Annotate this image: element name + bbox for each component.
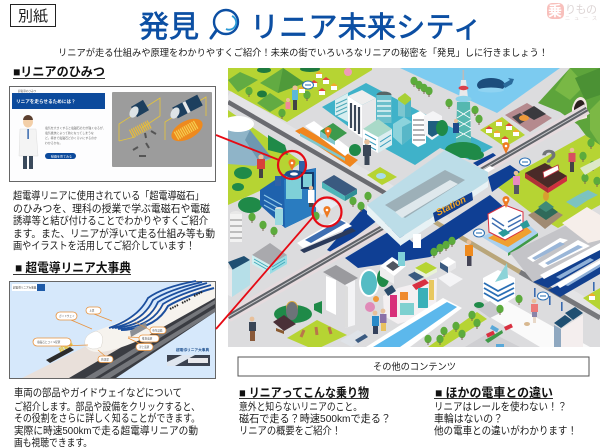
section: リニアってこんな乗り物: リニアの概要をご紹介！ [239, 424, 341, 437]
text block: 大事典 description: その役割をさらに詳しく知ることができます。 [14, 412, 200, 424]
description text: ど。極まで電磁石どのくらいにするのか [45, 135, 97, 140]
park: castle hill [495, 135, 600, 228]
person: elder [568, 148, 576, 172]
section: リニアってこんな乗り物: 磁石で走る？時速500kmで走る？ [239, 412, 391, 425]
site logo and thumbnail: 超電導リニア大事典 [176, 347, 209, 352]
stamp: 別紙: 別紙 [18, 8, 48, 25]
shopping street buildings [383, 270, 437, 324]
header band [12, 93, 105, 109]
heading: 超電導リニア大事典: ■ 超電導リニア大事典 [15, 260, 131, 275]
train [85, 281, 215, 352]
watermark logo [547, 3, 597, 22]
icon: magnifier [211, 10, 238, 38]
gate towers [314, 265, 358, 328]
text block: リニアのひみつ description: 超電導リニアに使用されている「超電導磁石」 [13, 189, 204, 202]
station sign: Station [434, 194, 468, 219]
guideway: 超電導 [58, 341, 74, 354]
heading box: その他のコンテンツ [238, 357, 589, 376]
header band: リニアを走らせるためには？ [16, 98, 76, 105]
section: ほかの電車との違い: ■ ほかの電車との違い [435, 385, 553, 400]
part labels: 先頭部 [101, 358, 109, 362]
castle [528, 191, 563, 229]
panel: screenshot of 超電導リニア大事典 [10, 281, 216, 378]
section: ほかの電車との違い: 車輪はないの？ [434, 412, 503, 425]
description text: 電気抵抗によって熱になってしまうな [45, 130, 94, 135]
people with balloons [365, 296, 386, 334]
part labels: 推進装置 [142, 336, 153, 340]
section: ほかの電車との違い [434, 385, 577, 437]
title [139, 10, 482, 44]
person: pink jacket [513, 171, 520, 194]
tower [445, 70, 484, 160]
text block: 大事典 description: 車両の部品やガイドウェイなどについて [14, 386, 182, 399]
description text: わかるかな。 [45, 140, 62, 145]
text block: リニアのひみつ description: 画やイラストを活用してご紹介しています！ [13, 239, 195, 252]
part labels: ガイドウェイ [59, 314, 75, 318]
lawn with deer [287, 320, 347, 350]
mall [482, 205, 538, 256]
person: family [286, 85, 298, 110]
panel: screenshot of リニアのひみつ [10, 86, 216, 182]
part labels: 上部 [89, 308, 95, 312]
person: orange shirt [465, 240, 473, 266]
road: main diagonal [228, 96, 600, 318]
text block: リニアのひみつ description: のひみつを、理科の授業で学ぶ電磁石や電磁 [13, 202, 210, 215]
section: リニアってこんな乗り物: ■ リニアってこんな乗り物 [239, 385, 369, 400]
water plaza under towers [322, 83, 493, 165]
temple with great buddha [273, 301, 312, 334]
section: リニアってこんな乗り物: 意外と知らないリニアのこと。 [239, 400, 362, 413]
scientist figure [19, 115, 38, 169]
building: white with skylight [380, 252, 406, 284]
watermark logo: りもの [565, 3, 597, 16]
stamp: 別紙 [10, 4, 56, 26]
elevated guideway [228, 109, 587, 317]
person: red jacket [257, 154, 265, 178]
callout: red circles and connectors [216, 135, 342, 329]
stacked and white blocks [415, 257, 463, 287]
site logo and thumbnail [167, 347, 210, 366]
text block: 大事典 description [14, 386, 200, 448]
park: lower left with mountain [222, 110, 302, 213]
experiment panel [112, 92, 212, 167]
navy platforms [327, 153, 520, 268]
heading box: その他のコンテンツ: その他のコンテンツ [373, 361, 456, 373]
watermark logo: 乗 [548, 3, 562, 19]
guideway [22, 282, 215, 378]
description text [45, 125, 106, 145]
title: リニア未来シティ [250, 11, 482, 44]
building: orange station [295, 121, 361, 167]
location pins [288, 127, 510, 218]
station building [367, 150, 488, 248]
panel: screenshot of リニアのひみつ: 超電導のひみつ [18, 89, 37, 93]
building: blue hospital [260, 161, 316, 228]
parking and trees [424, 311, 520, 347]
watermark logo: ニュース [565, 16, 597, 22]
illustrated city map [222, 66, 600, 350]
shop with question mark [525, 144, 567, 193]
lower left buildings [228, 211, 287, 297]
panel: screenshot of 超電導リニア大事典: 超電導リニア大事典 [13, 286, 37, 290]
description text: 電気を大きくすると電磁石の力が強くなるが、 [45, 125, 106, 130]
heading: リニアのひみつ: ■リニアのひみつ [13, 65, 105, 79]
lawn with fountain [367, 167, 397, 185]
person: police officer [453, 119, 459, 133]
person: businessman [363, 139, 371, 165]
linear train on guideway [484, 166, 495, 172]
white low building [341, 330, 368, 346]
text block: リニアのひみつ description: ます。また、リニアが浮いて走る仕組み等も動 [13, 227, 215, 240]
twin towers [554, 307, 583, 347]
subtitle: リニアが走る仕組みや原理をわかりやすくご紹介！未来の街でいろいろなリニアの秘密を「発見」しに行きましょう！ [58, 47, 548, 59]
speech bubbles [474, 158, 548, 300]
section: ほかの電車との違い: 他の電車との違いがわかります！ [434, 424, 577, 437]
lower right white plaza [488, 300, 590, 347]
button: 動画を見てみる [51, 153, 72, 158]
part labels [33, 307, 166, 362]
section: ほかの電車との違い: リニアはレールを使わない！？ [434, 400, 567, 413]
text block: リニアのひみつ description: 誘導等と結び付けることでわかりやすくご紹介 [13, 214, 208, 227]
text block: リニアのひみつ description [13, 189, 215, 252]
button [45, 153, 76, 159]
text block: 大事典 description: 実際に時速500kmで走る超電導リニアの動 [14, 424, 198, 437]
residential lot [480, 103, 552, 147]
part labels: 車内設備 [152, 328, 163, 332]
shop with question mark: ? [541, 144, 557, 174]
park: top left hills [228, 66, 372, 122]
water: bay [400, 68, 560, 113]
building: oval facade [359, 269, 389, 297]
building: teal shop [322, 175, 357, 201]
text block: 大事典 description: ご紹介します。部品や設備をクリックすると、 [14, 400, 200, 413]
part labels: 電磁石とコイル配置 [37, 340, 61, 344]
person: doctor [308, 186, 314, 207]
train at linear pavilion [297, 198, 356, 253]
rail yard [510, 207, 600, 311]
pool [366, 298, 462, 347]
person: walking dog [524, 299, 538, 326]
part labels: 浮上装置 [139, 345, 150, 349]
section: リニアってこんな乗り物 [239, 385, 391, 437]
whale [477, 78, 514, 92]
person: man in jacket [249, 317, 256, 341]
mountain with tunnel [538, 68, 600, 150]
building cluster [335, 90, 448, 153]
title: 発見 [139, 11, 199, 44]
building: sail tower [474, 263, 515, 318]
